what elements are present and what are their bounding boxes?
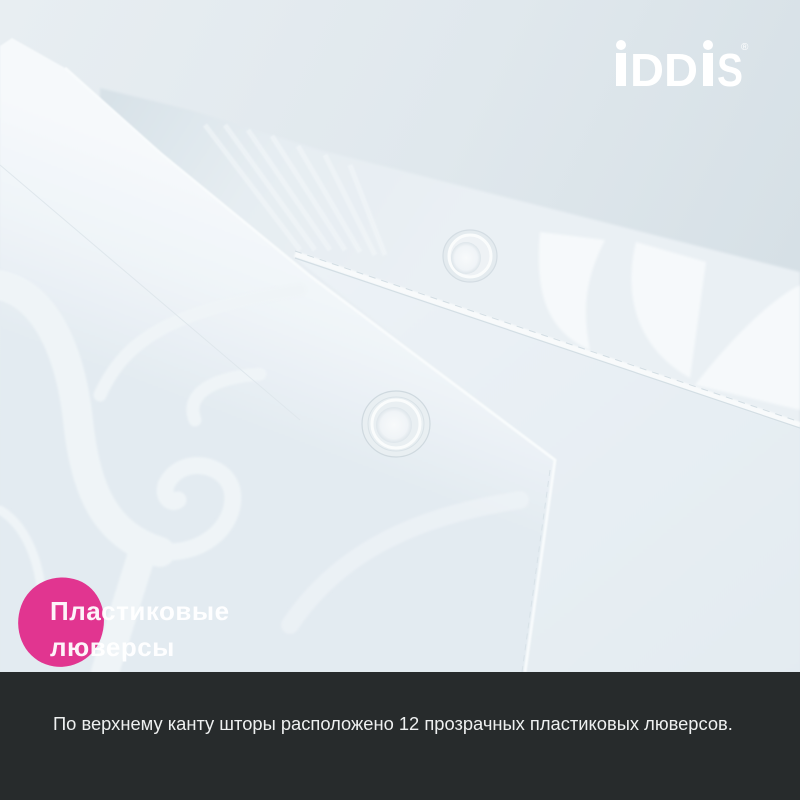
logo: iDDiS: ® <box>741 42 749 53</box>
middle fabric layer <box>100 88 800 672</box>
front fabric panel <box>0 38 555 672</box>
heading: Пластиковые <box>50 596 230 626</box>
logo: iDDiS <box>616 40 749 94</box>
heading <box>50 596 230 662</box>
icon: lower grommet <box>362 391 430 457</box>
icon: upper grommet <box>443 230 497 282</box>
caption text: По верхнему канту шторы расположено 12 прозрачных пластиковых люверсов. <box>53 713 733 734</box>
swirl pattern <box>0 285 520 672</box>
pink blob <box>5 565 117 679</box>
seam with stitches <box>295 251 800 428</box>
caption bar <box>0 672 800 800</box>
lower fabric below seam <box>295 258 800 672</box>
heading: люверсы <box>50 632 175 662</box>
front panel edge <box>65 68 555 672</box>
